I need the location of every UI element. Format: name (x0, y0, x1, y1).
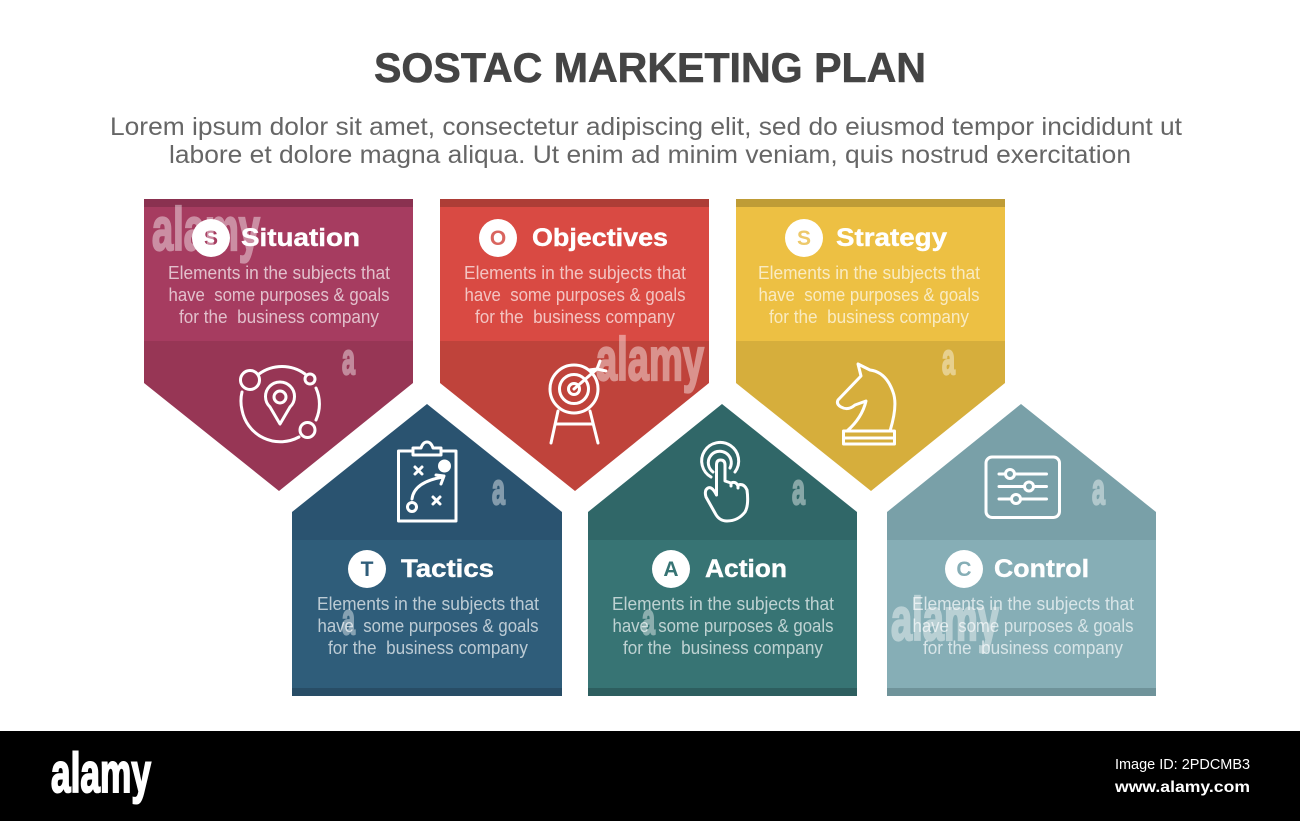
subtitle text block: labore et dolore magna aliqua. Ut enim ad minim veniam, quis nostrud exercitation (169, 141, 1131, 169)
badge: S: S (797, 227, 811, 250)
text: action description: Elements in the subjects that (612, 594, 834, 614)
text: situation description: Elements in the subjects that (168, 263, 390, 283)
badge: A (652, 550, 690, 588)
watermarks: a (642, 595, 655, 644)
text: strategy description: Elements in the subjects that (758, 263, 980, 283)
icon: sliders (986, 457, 1060, 518)
badge: T (348, 550, 386, 588)
image id: Image ID: 2PDCMB3 (1115, 756, 1250, 773)
heading: Strategy: Strategy (836, 224, 947, 252)
subtitle text block: Lorem ipsum dolor sit amet, consectetur adipiscing elit, sed do eiusmod tempor incididunt ut (110, 113, 1182, 141)
text: strategy description (758, 263, 980, 327)
watermarks: a (942, 335, 955, 384)
watermarks: a (492, 465, 505, 514)
watermarks: alamy (891, 586, 999, 653)
watermarks: a (1092, 465, 1105, 514)
subtitle text block (110, 113, 1182, 169)
text: control description: have some purposes & goals (912, 616, 1134, 636)
panel: objectives (440, 199, 709, 491)
heading: Situation: Situation (241, 224, 360, 252)
panel: situation (144, 199, 413, 491)
badge: O (479, 219, 517, 257)
watermarks (152, 196, 1105, 653)
text: objectives description (464, 263, 686, 327)
watermarks: a (342, 595, 355, 644)
text: action description (612, 594, 834, 658)
icon: chess knight (837, 364, 895, 444)
badge: S: S (204, 227, 218, 250)
text: tactics description: Elements in the subjects that (317, 594, 539, 614)
text: strategy description: for the business company (769, 307, 969, 327)
text: action description: have some purposes & goals (612, 616, 834, 636)
icon: target (550, 361, 606, 443)
icon: hand tap (702, 442, 748, 521)
heading: Control: Control (994, 555, 1089, 583)
text: objectives description: Elements in the subjects that (464, 263, 686, 283)
watermarks: a (792, 465, 805, 514)
watermarks: alamy (152, 196, 260, 263)
text: tactics description: have some purposes & goals (318, 616, 538, 636)
text: tactics description: for the business company (328, 638, 528, 658)
text: situation description (168, 263, 390, 327)
text: control description: Elements in the subjects that (912, 594, 1134, 614)
heading: Tactics: Tactics (401, 555, 494, 583)
text: control description (912, 594, 1134, 658)
icon: location orbit (240, 366, 319, 442)
panel: strategy (736, 199, 1005, 491)
badge: S (192, 219, 230, 257)
panel: control (887, 404, 1156, 696)
badge: S (785, 219, 823, 257)
footer logo: alamy (51, 741, 151, 804)
title: SOSTAC MARKETING PLAN (374, 44, 926, 91)
footer bar (0, 731, 1300, 821)
text: action description: for the business company (623, 638, 823, 658)
website: www.alamy.com (1114, 779, 1250, 796)
heading: Objectives: Objectives (532, 224, 668, 252)
panel: action (588, 404, 857, 696)
watermarks: alamy (596, 326, 704, 393)
panel: tactics (292, 404, 562, 696)
icon: tactics clipboard (398, 442, 456, 521)
badge: A: A (663, 558, 679, 581)
badge: T: T (361, 558, 374, 581)
text: control description: for the business company (923, 638, 1123, 658)
badge: C: C (956, 558, 972, 581)
text: strategy description: have some purposes & goals (758, 285, 980, 305)
badge: O: O (490, 227, 506, 250)
badge: C (945, 550, 983, 588)
heading: Action: Action (705, 555, 787, 583)
text: tactics description (317, 594, 539, 658)
text: objectives description: for the business company (475, 307, 675, 327)
text: situation description: have some purposes & goals (168, 285, 390, 305)
text: objectives description: have some purposes & goals (464, 285, 686, 305)
text: situation description: for the business company (179, 307, 379, 327)
watermarks: a (342, 335, 355, 384)
